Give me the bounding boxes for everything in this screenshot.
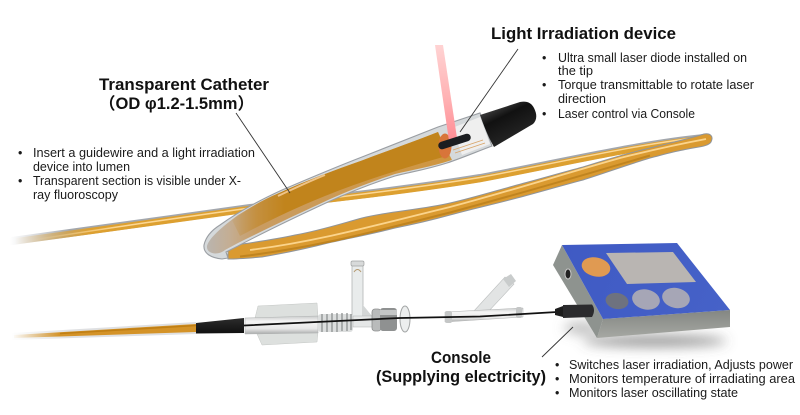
left side face [553,245,603,338]
front face [597,310,730,338]
text block: console features: • [555,372,559,386]
leader: console [542,327,573,357]
text block: device features [542,51,754,121]
lower wing [257,332,318,345]
text block: device features: • [542,78,546,92]
heading: transparent catheter: （OD φ1.2-1.5mm） [99,94,254,113]
text block: catheter features: ray fluoroscopy [33,188,119,202]
text block: device features: direction [558,92,606,106]
middle button [630,287,662,312]
orange lumen core [207,132,452,253]
heading: transparent catheter [99,76,270,113]
text block: catheter features: Insert a guidewire and a light irradiation [33,146,255,160]
text block: console features [555,358,795,400]
side port tube [351,261,372,318]
main transparent sheath [204,113,492,259]
dark button [604,291,630,311]
text block: catheter features: device into lumen [33,160,130,174]
black tapered strain relief [196,318,244,334]
screen [606,252,696,284]
core cut end [438,134,452,158]
clear tube section [452,117,490,155]
heading: console: Console [431,349,491,367]
orange button [580,255,612,279]
spiral strain section [318,313,373,332]
inner lines [453,140,485,153]
cable plug [555,304,594,318]
text block: console features: Monitors laser oscillating state [569,386,738,400]
illustration: console [553,243,730,347]
rear strand [12,138,704,242]
text block: console features: • [555,358,559,372]
illustration: catheter loop [12,45,712,259]
text block: console features: Switches laser irradiation, Adjusts power [569,358,793,372]
laser beam [435,45,457,141]
return strand [228,134,712,259]
hub body [245,316,318,334]
diode rod [442,138,467,146]
leader: catheter [236,113,290,193]
text block: device features: Laser control via Console [558,107,695,121]
heading: transparent catheter: Transparent Catheter [99,76,270,94]
text block: device features: Torque transmittable to rotate laser [558,78,754,92]
luer connector [372,306,410,332]
text block: device features: • [542,51,546,65]
lower catheter shaft [12,322,196,340]
text block: catheter features: • [18,146,22,160]
text block: catheter features: Transparent section is visible under X- [33,174,241,188]
text block: console features: Monitors temperature of irradiating area [569,372,795,386]
leader: light irradiation device [460,49,518,132]
wire [244,312,557,326]
heading: console [376,349,546,386]
text block: console features: • [555,386,559,400]
lumen dark band [232,132,447,236]
black tip [480,102,536,147]
Y connector [445,274,523,323]
text block: catheter features [18,146,255,202]
illustration: hub assembly and lower catheter [12,261,557,345]
heading: light irradiation device: Light Irradiation device [491,25,676,43]
right button [660,285,692,311]
text block: device features: • [542,107,546,121]
heading: console: (Supplying electricity) [376,368,546,386]
shadow [564,322,727,347]
text block: device features: Ultra small laser diode installed on [558,51,747,65]
power jack [565,269,571,279]
text block: catheter features: • [18,174,22,188]
upper wing [255,303,318,318]
top face [562,243,730,319]
lumen highlight [278,175,325,196]
text block: device features: the tip [558,64,593,78]
